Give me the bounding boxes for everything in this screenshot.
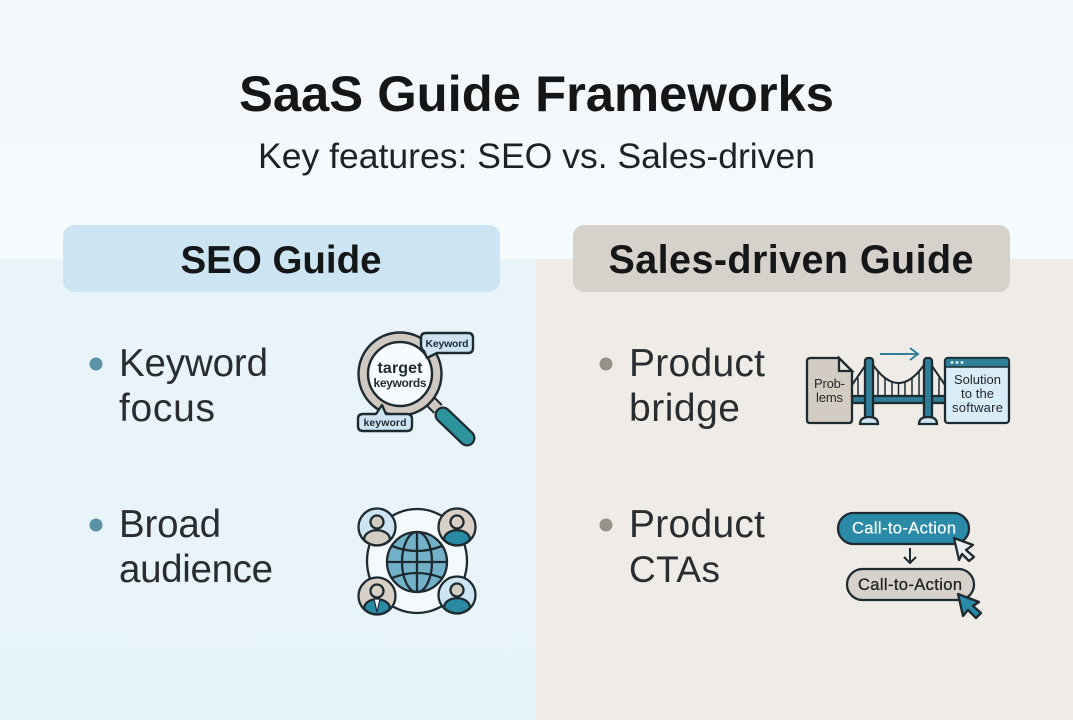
icon: magnifying glass with keywords: keyword [364,417,406,429]
item: Broad audience [90,503,273,591]
button: secondary: Call-to-Action [858,576,962,594]
window: Solution to the software [945,358,1009,423]
item: Product CTAs [600,503,765,590]
icon: call-to-action buttons [838,513,981,618]
cursor: light [954,538,974,561]
heading: SEO Guide: SEO Guide [180,239,382,282]
heading: Sales-driven Guide [573,225,1010,292]
icon: product bridge [807,348,1009,424]
window: Solution to the software: Solution [954,372,1001,387]
icon: magnifying glass with keywords: Keyword [426,338,468,350]
document: Problems: lems [816,390,844,405]
heading: SEO Guide [63,225,500,292]
arrow: problem to solution [880,348,918,360]
item: Product bridge [600,342,765,430]
icon: globe with audience [358,508,476,614]
person: top right [438,508,476,546]
button: primary [838,513,969,544]
panel: SEO background [0,259,536,720]
item: Product CTAs: CTAs [629,549,720,590]
heading: Sales-driven Guide: Sales-driven Guide [608,238,974,282]
icon: magnifying glass with keywords [358,332,473,438]
document: Problems: Prob- [814,376,845,391]
icon: magnifying glass with keywords: target [378,360,423,377]
item: Keyword focus: Keyword [119,342,268,385]
window: Solution to the software: software [952,400,1003,415]
icon: magnifying glass with keywords: keywords [374,376,427,390]
person: bottom right [438,576,476,614]
item: Product bridge: bridge [629,387,740,430]
item: Product CTAs: Product [629,503,765,546]
cursor: teal [958,594,981,618]
button: secondary [847,569,974,600]
item: Keyword focus [90,342,268,430]
title: SaaS Guide Frameworks [239,66,834,122]
button: primary: Call-to-Action [852,520,956,538]
window: Solution to the software: to the [961,386,994,401]
subtitle: Key features: SEO vs. Sales-driven [258,137,815,176]
item: Product bridge: Product [629,342,765,385]
document: Problems [807,358,852,423]
panel: Sales-driven background [536,259,1073,720]
item: Keyword focus: focus [119,387,215,430]
bridge [852,358,946,424]
item: Broad audience: Broad [119,503,221,546]
person: top left [358,508,396,546]
arrow: down [904,548,916,563]
item: Broad audience: audience [119,548,273,591]
person: bottom left [358,578,396,614]
